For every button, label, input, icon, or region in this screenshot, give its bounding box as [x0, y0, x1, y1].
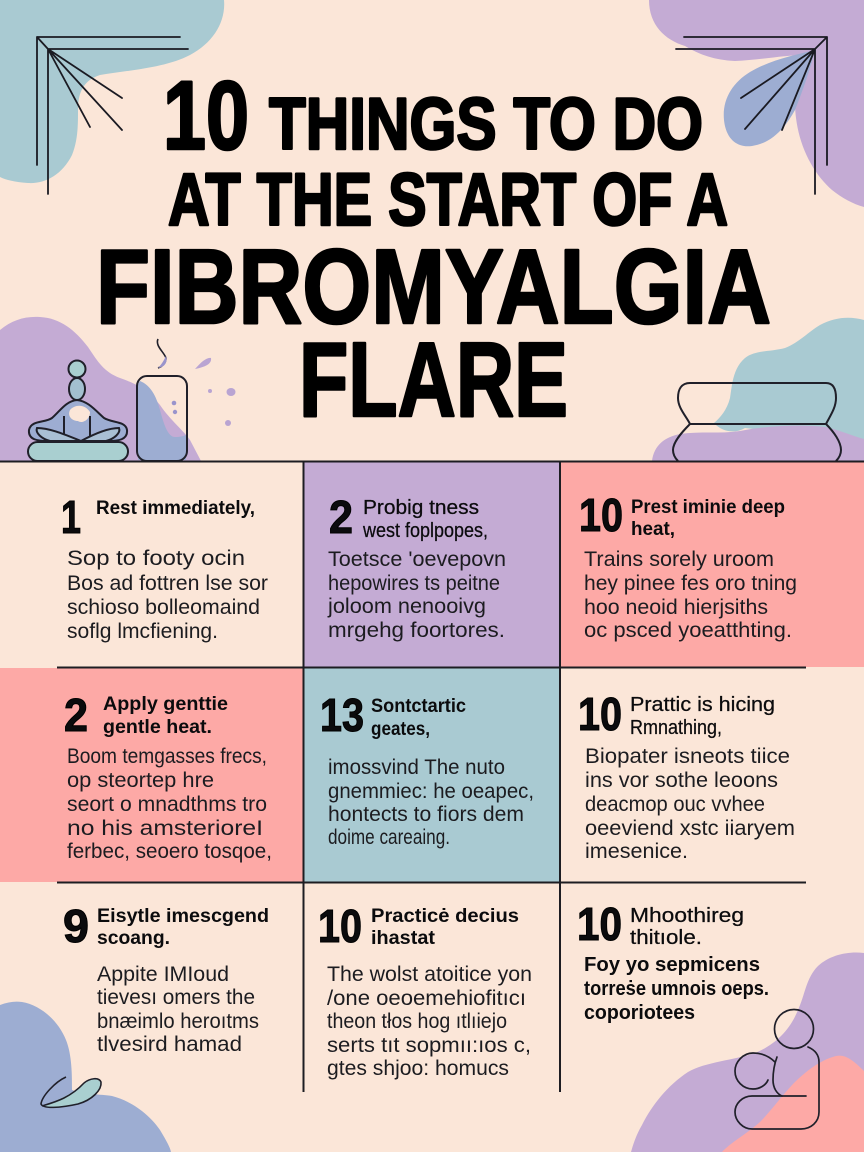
tip 7: 9 [63, 900, 89, 952]
tip 9 [577, 898, 769, 1024]
tip 2: hepowires ts peitne [328, 571, 500, 595]
tip 4: op steortep hre [67, 768, 214, 792]
blob: mid-right purple [652, 426, 864, 461]
tip 5: Sontctartic [371, 695, 466, 717]
tip 2: west foplpopes, [362, 520, 488, 542]
cell background: pink middle left [0, 668, 303, 882]
blob: top-left teal [0, 0, 224, 183]
tip 1: Rest immediately, [96, 497, 255, 519]
tip 1: 1 [61, 491, 81, 543]
tip 6: Rmnathing, [630, 717, 722, 739]
decorative corner lines: top-right [676, 37, 827, 194]
tip 7: Appite IMIoud [97, 962, 229, 986]
tip 6: deacmop ouc vvhee [585, 792, 765, 816]
tip 8: ihastat [371, 927, 436, 949]
tip 8: /one oeoemehiofitıcı [327, 986, 526, 1010]
blob: top-right purple [649, 0, 864, 207]
tip 2: 2 [329, 491, 353, 543]
tip 4: 2 [64, 689, 88, 741]
icon: floating dots [195, 358, 236, 426]
tip 9: 10 [577, 898, 622, 950]
icon: meditating figure [28, 360, 128, 461]
title: 10 [163, 61, 249, 170]
tip 4: Boom temgasses frecs, [67, 744, 267, 768]
tip 3: oc psced yoeatthting. [584, 618, 792, 642]
tip 5 [320, 689, 534, 849]
tip 1 [61, 491, 268, 643]
tip 6 [578, 688, 795, 863]
tip 4: seort o mnadthms tro [67, 792, 267, 816]
tip 7: tlvesird hamad [97, 1032, 242, 1056]
tip 3: hey pinee fes oro tning [584, 571, 797, 595]
tip 3: Trains sorely uroom [584, 547, 774, 571]
tip 4: gentle heat. [103, 716, 212, 738]
icon: candle with smoke [137, 339, 187, 461]
tip 9: torreṡe umnois oeps. [584, 977, 769, 1000]
blob: bottom-left blue [0, 1002, 171, 1152]
tip 4: no his amsterioreI [67, 816, 263, 840]
title: FLARE [299, 321, 568, 439]
tip 4 [64, 689, 272, 863]
tip 5: gnemmiec: he oeapec, [328, 779, 534, 803]
blob: bottom-right pink [722, 1056, 864, 1152]
tip 7: bnæimlo heroıtms [97, 1009, 259, 1033]
tip 4: ferbec, seoero tosqoe, [67, 839, 272, 863]
tip 8: Practicė decius [371, 905, 519, 927]
tip 8: The wolst atoitice yon [327, 962, 532, 986]
tip 8: serts tıt sopmıı:ıos c, [327, 1033, 531, 1057]
tip 6: Biopater isneots tiice [585, 744, 790, 768]
tip 1: Sop to footy ocin [67, 546, 245, 570]
blob: bottom-right purple [631, 953, 864, 1152]
icon: stacked cushions [673, 383, 841, 461]
blob: top-right blue leaf [724, 50, 815, 146]
tip 8: theon tłos hog ıtlıiejo [327, 1009, 507, 1033]
tip 9: coporiotees [584, 1001, 695, 1024]
tip 3: 10 [579, 489, 623, 541]
cell background: teal [304, 668, 560, 882]
tip 7 [63, 900, 269, 1056]
tip 6: ins vor sothe leoons [585, 768, 778, 792]
tip 1: soflg lmcfiening. [67, 619, 218, 643]
blob: mid-left purple [0, 317, 201, 461]
cell background: purple [304, 462, 560, 667]
tip 9: Mhoothireg [630, 905, 744, 927]
tip 6: imesenice. [585, 839, 688, 863]
icon: resting figure outline [735, 1010, 819, 1129]
tip 8 [318, 900, 532, 1080]
panel: tips grid [0, 461, 864, 1092]
tip 3: Prest iminie deep [631, 496, 785, 518]
tip 8: gtes shjoo: homucs [327, 1056, 509, 1080]
title [96, 61, 771, 439]
tip 2: Toetsce 'oevepovn [328, 547, 506, 571]
tip 1: schioso bolleomaind [67, 595, 260, 619]
tip 5: 13 [320, 689, 364, 741]
title: THINGS TO DO [269, 84, 703, 165]
tip 5: hontects to fiors dem [328, 802, 524, 826]
tip 9: thitıole. [630, 927, 702, 949]
tip 1: Bos ad fottren lse sor [67, 571, 268, 595]
tip 2: Probig tness [363, 497, 479, 519]
tip 5: doime careaing. [328, 825, 450, 849]
tip 3: heat, [631, 518, 675, 540]
decorative corner lines: top-left [37, 37, 188, 194]
tip 3: hoo neoid hierjsiths [584, 595, 768, 619]
tip 6: 10 [578, 688, 622, 740]
tip 8: 10 [318, 900, 362, 952]
tip 7: scoang. [97, 927, 170, 949]
tip 4: Apply genttie [103, 693, 228, 715]
tip 3 [579, 489, 797, 642]
icon: leaf bottom-left [41, 1077, 101, 1107]
tip 7: tievesı omers the [97, 985, 255, 1009]
tip 9: Foy yo sepmicens [584, 953, 760, 976]
tip 2: mrgehg foortores. [328, 618, 505, 642]
tip 2: joloom nenooivg [327, 594, 486, 618]
blob: mid-right teal [714, 318, 864, 442]
tip 2 [327, 491, 506, 642]
tip 6: Prattic is hicing [630, 694, 775, 716]
tip 5: imossvind The nuto [328, 755, 505, 779]
tip 6: oeeviend xstc iiaryem [585, 816, 795, 840]
tip 5: geates, [371, 718, 430, 740]
tip 7: Eisytle imescgend [97, 905, 269, 927]
cell background: pink top right [561, 462, 864, 667]
